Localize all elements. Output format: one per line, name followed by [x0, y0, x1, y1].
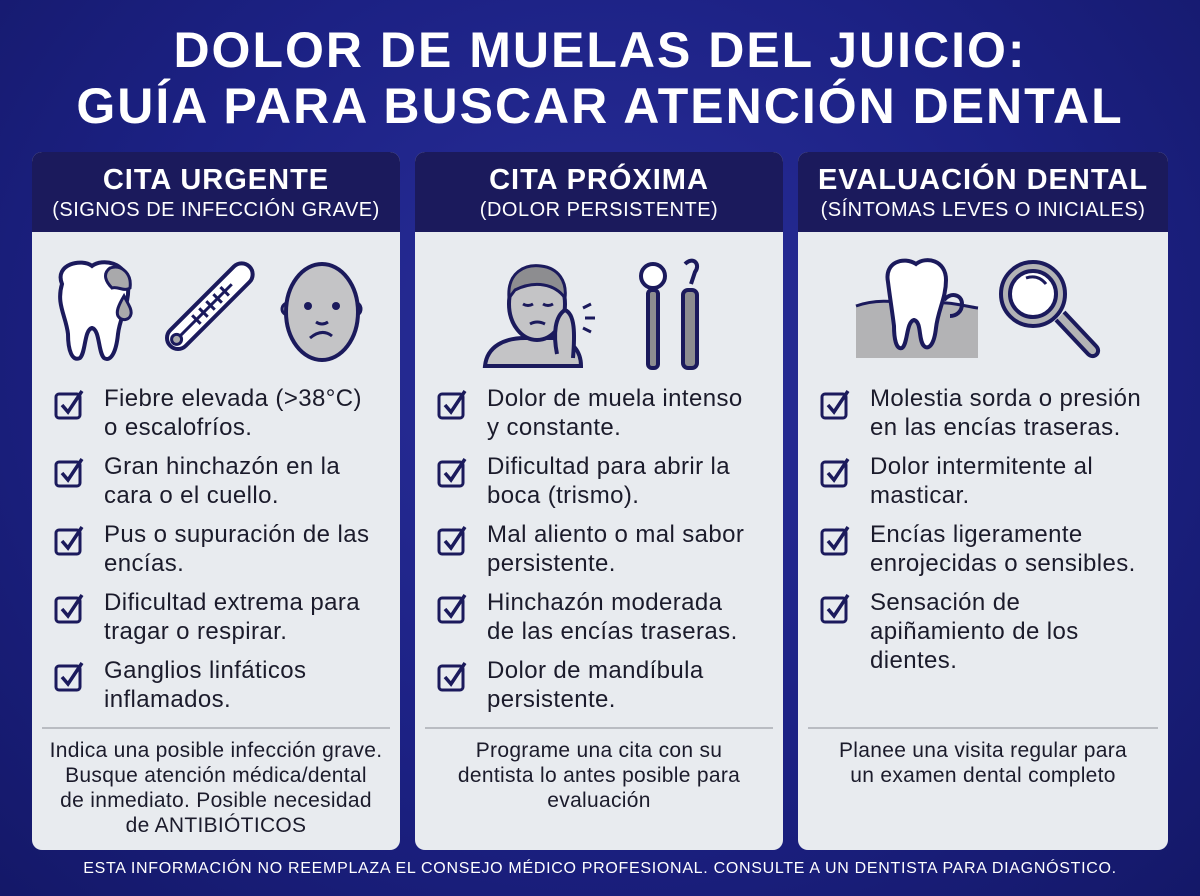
panel: cita proxima [415, 152, 783, 850]
checklist: persistente. [487, 686, 616, 713]
panel: cita urgente [32, 152, 400, 850]
checklist: o escalofríos. [104, 414, 252, 441]
checklist: Fiebre elevada (>38°C) [104, 385, 362, 412]
note: evaluacion [839, 739, 1127, 787]
checklist: boca (trismo). [487, 482, 639, 509]
note: evaluacion: Planee una visita regular para [839, 739, 1127, 762]
footer disclaimer: ESTA INFORMACIÓN NO REEMPLAZA EL CONSEJO MÉDICO PROFESIONAL. CONSULTE A UN DENTISTA PARA DIAGNÓSTICO. [83, 860, 1117, 877]
checklist: dientes. [870, 647, 957, 674]
checklist: Gran hinchazón en la [104, 453, 340, 480]
checklist: de las encías traseras. [487, 618, 738, 645]
note: evaluacion: un examen dental completo [850, 764, 1116, 787]
checklist: Pus o supuración de las [104, 521, 369, 548]
header: evaluacion [798, 152, 1168, 232]
checklist: persistente. [487, 550, 616, 577]
icons: tooth, thermometer, swollen face [58, 260, 362, 362]
note: urgent [50, 739, 382, 837]
checklist: apiñamiento de los [870, 618, 1079, 645]
checklist: Sensación de [870, 589, 1020, 616]
checklist: y constante. [487, 414, 621, 441]
header: evaluacion: (SÍNTOMAS LEVES O INICIALES) [821, 199, 1145, 221]
header: cita proxima: CITA PRÓXIMA [489, 164, 709, 196]
icons: face in pain, dental tools [482, 258, 700, 370]
note: proxima: evaluación [547, 789, 651, 812]
checklist: Dificultad extrema para [104, 589, 360, 616]
note: proxima [458, 739, 740, 812]
checklist: Dolor de mandíbula [487, 657, 704, 684]
checklist: masticar. [870, 482, 970, 509]
checklist: Dolor de muela intenso [487, 385, 743, 412]
note: urgent: Indica una posible infección grave. [50, 739, 382, 762]
header: cita urgente: CITA URGENTE [103, 164, 329, 196]
title [76, 22, 1124, 134]
checklist: tragar o respirar. [104, 618, 287, 645]
title: GUÍA PARA BUSCAR ATENCIÓN DENTAL [76, 78, 1124, 134]
checklist [54, 385, 369, 713]
checklist: Hinchazón moderada [487, 589, 722, 616]
checklist: encías. [104, 550, 184, 577]
checklist: Mal aliento o mal sabor [487, 521, 744, 548]
header: cita urgente [32, 152, 400, 232]
checklist: Ganglios linfáticos [104, 657, 306, 684]
checklist: Dolor intermitente al [870, 453, 1093, 480]
checklist: cara o el cuello. [104, 482, 279, 509]
checklist: en las encías traseras. [870, 414, 1121, 441]
checklist: Molestia sorda o presión [870, 385, 1141, 412]
note: proxima: dentista lo antes posible para [458, 764, 740, 787]
title: DOLOR DE MUELAS DEL JUICIO: [173, 22, 1027, 78]
header: cita urgente: (SIGNOS DE INFECCIÓN GRAVE) [52, 199, 380, 221]
header: cita proxima: (DOLOR PERSISTENTE) [480, 199, 718, 221]
checklist: enrojecidas o sensibles. [870, 550, 1136, 577]
note: urgent: de ANTIBIÓTICOS [126, 814, 306, 837]
checklist: Encías ligeramente [870, 521, 1083, 548]
checklist: Dificultad para abrir la [487, 453, 730, 480]
checklist [438, 385, 744, 713]
note: urgent: Busque atención médica/dental [65, 764, 367, 787]
header: cita proxima [415, 152, 783, 232]
note: urgent: de inmediato. Posible necesidad [60, 789, 372, 812]
checklist [820, 385, 1141, 674]
panel: evaluacion dental [798, 152, 1168, 850]
header: evaluacion: EVALUACIÓN DENTAL [818, 164, 1148, 196]
checklist: inflamados. [104, 686, 231, 713]
icons: erupting tooth, magnifier [856, 258, 1100, 358]
note: proxima: Programe una cita con su [476, 739, 722, 762]
